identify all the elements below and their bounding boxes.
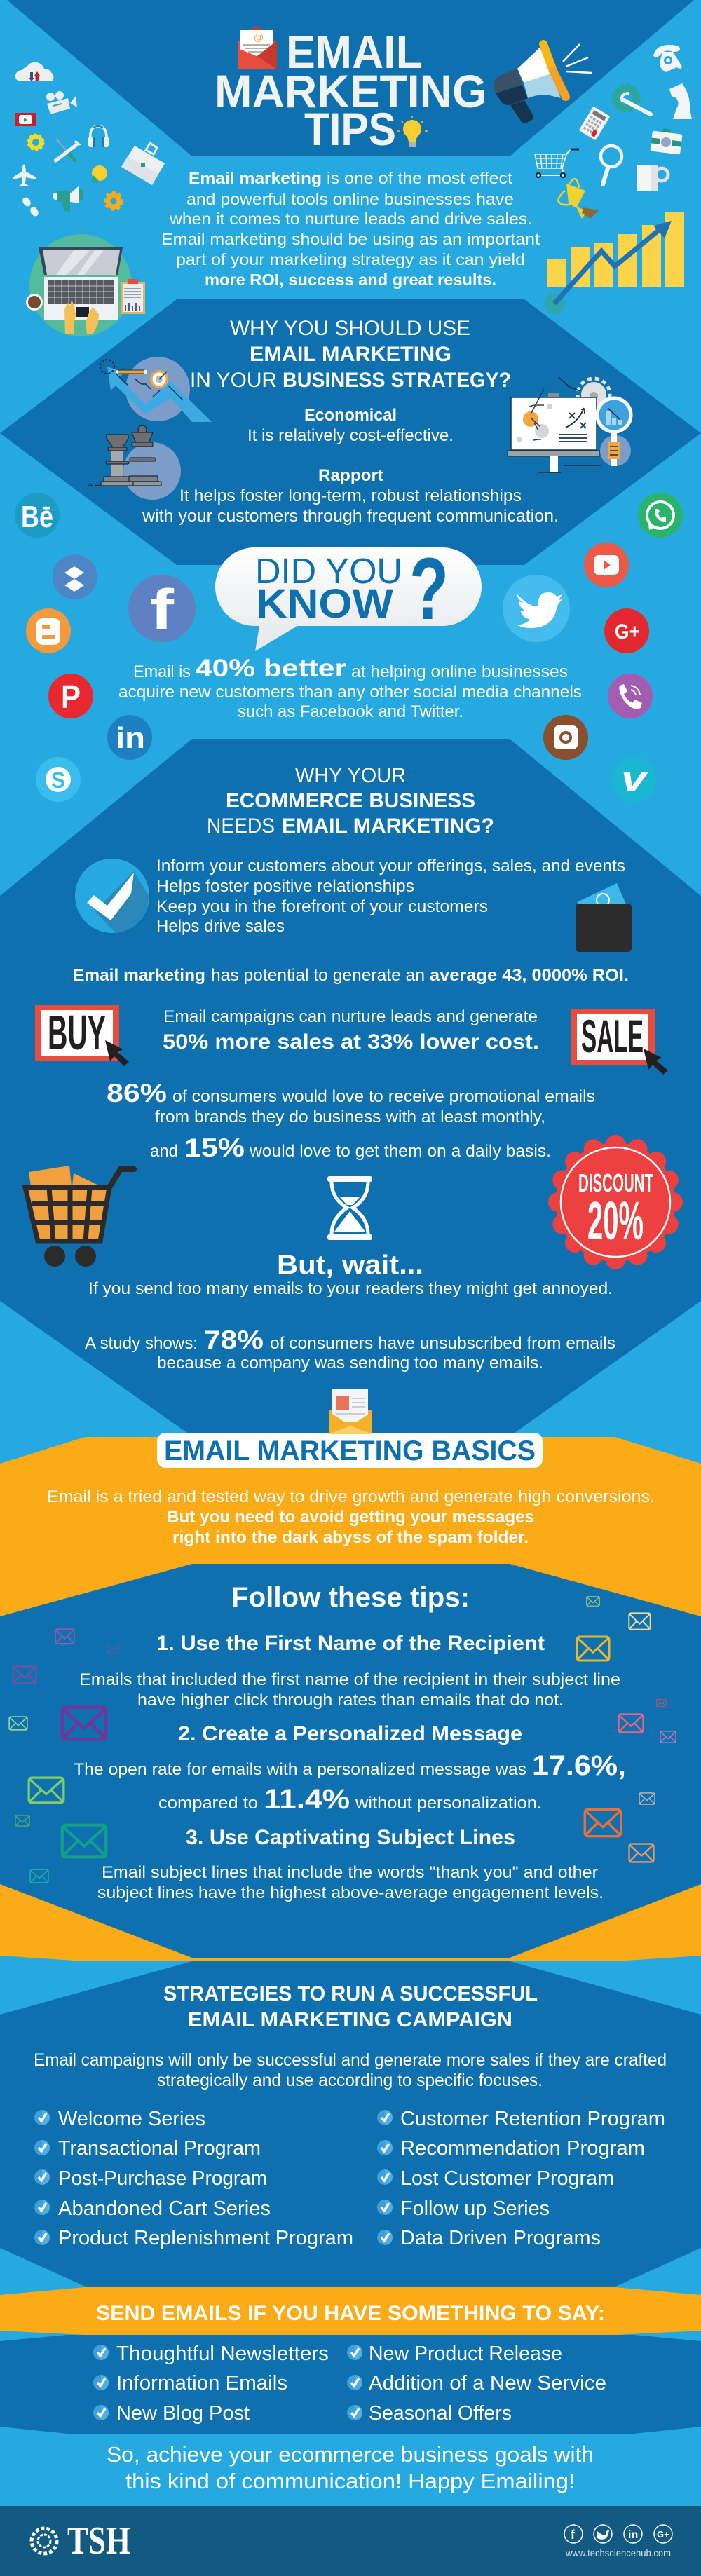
list: strategy programs left: Transactional Program <box>58 2137 261 2160</box>
title: MARKETING <box>215 65 487 117</box>
text block: 50 percent more sales <box>163 1007 539 1054</box>
text block: 86 percent statistic: from brands they do business with at least monthly, <box>155 1108 545 1126</box>
panel: send emails band <box>0 2287 701 2335</box>
heading: follow these tips: Follow these tips: <box>231 1582 470 1613</box>
text block: tip 2: 17.6%, <box>532 1750 626 1781</box>
list: strategy programs right: Lost Customer Program <box>400 2167 614 2190</box>
text block: 40 percent better: 40% better <box>196 655 346 682</box>
text block: basics intro: right into the dark abyss of the spam folder. <box>172 1528 529 1547</box>
icon: orange envelope with letter <box>329 1389 372 1434</box>
text block: intro: Email marketing <box>189 169 322 187</box>
icon: linkedin <box>107 715 152 760</box>
text block: but wait: If you send too many emails to your readers they might get annoyed. <box>88 1279 613 1298</box>
text block: 50 percent more sales: 50% more sales at 33% lower cost. <box>163 1030 539 1054</box>
text block: 78 percent statistic: of consumers have unsubscribed from emails <box>270 1334 615 1353</box>
text block: tip 2: without personalization. <box>355 1794 542 1813</box>
icon: google plus <box>604 608 649 653</box>
text block: strategies intro <box>34 2050 667 2090</box>
icon: calculator <box>579 107 610 140</box>
icon: chess knight <box>669 83 692 119</box>
icon: vimeo <box>611 757 656 802</box>
text block: 15 percent statistic <box>150 1133 551 1162</box>
heading: why you should use: IN YOUR <box>190 369 277 392</box>
list: strategy programs left: Post-Purchase Program <box>58 2167 267 2190</box>
icon: camera <box>650 128 683 155</box>
heading: strategies: STRATEGIES TO RUN A SUCCESSFUL <box>163 1982 538 2005</box>
icons: footer social links: in <box>628 2529 638 2541</box>
icon: glasses <box>21 196 40 218</box>
text block: tip 3: 3. Use Captivating Subject Lines <box>186 1826 515 1849</box>
text block: closing message <box>107 2442 594 2493</box>
icon: whatsapp <box>638 493 683 538</box>
text block: intro: more ROI, success and great results. <box>205 271 496 289</box>
text block: tip 2: The open rate for emails with a personalized message was <box>74 1760 526 1779</box>
text block: basics intro: But you need to avoid getting your messages <box>167 1508 534 1527</box>
icon: behance: Bē <box>21 500 53 534</box>
list: strategy programs right: Data Driven Programs <box>400 2227 601 2249</box>
panel: send emails list <box>0 2335 701 2434</box>
icon: skype: S <box>51 768 65 793</box>
text block: economical: Economical <box>304 406 397 425</box>
text block: 86 percent statistic <box>107 1079 595 1126</box>
badge: discount 20 percent <box>548 1135 683 1269</box>
icon: briefcase <box>121 143 165 185</box>
icons: footer social links: G+ <box>657 2529 669 2540</box>
text block: tip 2: 11.4% <box>264 1784 350 1815</box>
icon: tools <box>55 139 80 161</box>
heading: why your ecommerce business: WHY YOUR <box>295 764 406 787</box>
text block: 40 percent better: at helping online businesses <box>351 662 568 681</box>
text block: 15 percent statistic: 15% <box>184 1133 245 1162</box>
title <box>215 26 487 155</box>
icon: light bulb <box>397 116 428 147</box>
text block: 40 percent better: Email is <box>133 662 191 681</box>
list: strategy programs left: Product Replenishment Program <box>58 2227 353 2249</box>
text block: basics intro: Email is a tried and tested way to drive growth and generate high conversions. <box>47 1487 655 1506</box>
icon: megaphone <box>494 44 592 123</box>
heading: why your ecommerce business: NEEDS <box>207 815 275 838</box>
icon: wallet with money <box>576 883 632 952</box>
text block: intro: part of your marketing strategy as it can yield <box>176 250 525 268</box>
panel: header hexagon <box>7 0 694 156</box>
icon: small bulb <box>91 165 107 184</box>
text block: benefits list <box>156 857 625 936</box>
icon: behance <box>15 493 60 538</box>
text block: 78 percent statistic <box>85 1326 615 1372</box>
icon: pinterest: P <box>61 679 81 715</box>
text block: 86 percent statistic: of consumers would love to receive promotional emails <box>172 1087 595 1106</box>
list: send emails left: New Blog Post <box>116 2402 250 2425</box>
list: send emails right: Addition of a New Service <box>369 2372 606 2394</box>
heading: send emails: SEND EMAILS IF YOU HAVE SOMETHING TO SAY: <box>96 2302 605 2325</box>
icon: cloud <box>15 62 54 81</box>
heading: why you should use: BUSINESS STRATEGY? <box>283 369 511 392</box>
icon: buy sign <box>35 1005 129 1066</box>
icon: wrench and gear <box>613 85 651 114</box>
panel: footer <box>0 2506 701 2576</box>
panel: basics orange band <box>0 1437 701 1961</box>
text block: closing message: So, achieve your ecommerce business goals with <box>107 2442 594 2467</box>
list: send emails right <box>347 2343 606 2425</box>
heading: why your ecommerce business <box>207 764 494 838</box>
text block: economical <box>247 406 454 445</box>
icon: telephone <box>653 45 682 72</box>
icon: viber <box>608 674 653 718</box>
text block: tip 2: 2. Create a Personalized Message <box>178 1722 522 1745</box>
callout: did you know bubble: ? <box>409 540 449 638</box>
callout: did you know bubble: DID YOU <box>255 551 402 591</box>
text block: intro: is one of the most effect <box>327 169 513 187</box>
icons: scattered envelopes <box>9 1597 676 1883</box>
icon: orange gear <box>105 193 122 210</box>
text block: basics intro <box>47 1487 655 1547</box>
list: strategy programs left <box>34 2108 353 2249</box>
text: website url: www.techsciencehub.com <box>565 2547 671 2558</box>
icon: trophy <box>558 179 599 219</box>
icon: pinterest <box>48 674 93 718</box>
list: send emails right: New Product Release <box>369 2343 562 2365</box>
badge: discount 20 percent: 20% <box>587 1191 644 1251</box>
heading: strategies: EMAIL MARKETING CAMPAIGN <box>188 2008 512 2031</box>
panel: follow these tips <box>0 1564 701 1958</box>
text block: average ROI <box>73 966 629 985</box>
icon: youtube <box>584 543 629 587</box>
title: TIPS <box>304 103 396 155</box>
text block: intro: and powerful tools online businesses have <box>186 190 514 208</box>
text block: tip 3: subject lines have the highest above-average engagement levels. <box>97 1883 604 1902</box>
text block: tip 1: Emails that included the first name of the recipient in their subject line <box>79 1670 620 1689</box>
icon: shopping cart <box>25 1166 134 1267</box>
text block: intro: when it comes to nurture leads and drive sales. <box>169 210 532 228</box>
panel: strategies <box>0 1961 701 2287</box>
text block: tip 1 <box>79 1632 620 1710</box>
text block: tip 1: have higher click through rates than emails that do not. <box>137 1691 564 1710</box>
icon: sale sign <box>571 1009 668 1075</box>
icon: yellow gear <box>28 135 43 150</box>
icon: play box <box>15 113 36 126</box>
text block: rapport: It helps foster long-term, robust relationships <box>179 486 522 505</box>
text block: but wait <box>88 1250 613 1298</box>
list: send emails right: Seasonal Offers <box>369 2402 512 2425</box>
icon: target and arrow <box>100 357 212 422</box>
icon: dropbox <box>52 554 97 599</box>
icon: instagram <box>543 715 588 760</box>
icon: email envelope: @ <box>254 32 264 43</box>
logo: TSH <box>32 2519 130 2563</box>
list: strategy programs left: Abandoned Cart Series <box>58 2197 271 2220</box>
text block: 78 percent statistic: because a company was sending too many emails. <box>157 1354 543 1372</box>
icon: facebook: f <box>150 578 175 642</box>
icon: mug <box>637 165 668 191</box>
icon: check mark circle <box>75 859 149 933</box>
text block: intro <box>161 169 540 289</box>
icon: buy sign: BUY <box>48 1005 106 1060</box>
text block: 40 percent better: acquire new customers than any other social media channels <box>118 683 582 702</box>
list: strategy programs right: Recommendation Program <box>400 2137 645 2160</box>
icon: video camera <box>46 91 77 114</box>
text block: benefits list: Inform your customers about your offerings, sales, and events <box>156 857 625 875</box>
panel: ecommerce business <box>0 739 701 1436</box>
text block: rapport <box>142 466 559 526</box>
icon: skype <box>36 757 81 802</box>
icon: shopping cart outline <box>535 149 579 177</box>
heading: why your ecommerce business: EMAIL MARKETING? <box>282 815 494 838</box>
text block: strategies intro: Email campaigns will only be successful and generate more sales if they are crafted <box>34 2050 667 2070</box>
list: send emails left: Information Emails <box>116 2372 287 2394</box>
text block: benefits list: Helps foster positive relationships <box>156 877 414 896</box>
icon: google plus: G+ <box>615 620 640 643</box>
list: send emails left: Thoughtful Newsletters <box>116 2343 329 2365</box>
text block: 78 percent statistic: A study shows: <box>85 1334 198 1353</box>
icon: twitter <box>503 575 570 642</box>
text block: 86 percent statistic: 86% <box>107 1079 167 1108</box>
panel: why use email marketing hexagon <box>0 299 701 565</box>
list: strategy programs right <box>377 2108 665 2249</box>
icon: sale sign: SALE <box>581 1010 644 1062</box>
icon: magnifying glass <box>601 146 622 184</box>
icon: airplane <box>13 164 36 186</box>
text block: 78 percent statistic: 78% <box>204 1326 264 1354</box>
text block: benefits list: Helps drive sales <box>156 917 285 936</box>
text block: tip 3: Email subject lines that include the words "thank you" and other <box>102 1863 598 1882</box>
callout: did you know bubble: KNOW <box>256 581 393 627</box>
text block: rapport: Rapport <box>318 466 383 485</box>
heading: strategies <box>163 1982 538 2031</box>
chart: rising bars with arrow <box>544 212 684 314</box>
heading pill: email marketing basics: EMAIL MARKETING BASICS <box>164 1436 536 1466</box>
logo: TSH: TSH <box>67 2519 130 2563</box>
icon: small megaphone <box>53 186 83 212</box>
list: strategy programs right: Follow up Series <box>400 2197 550 2220</box>
text block: average ROI: has potential to generate an <box>211 966 425 985</box>
text block: tip 3 <box>97 1826 604 1902</box>
text block: average ROI: Email marketing <box>73 966 205 985</box>
icon: chess pieces <box>88 425 181 500</box>
list: strategy programs right: Customer Retention Program <box>400 2108 665 2130</box>
callout: did you know bubble <box>215 540 482 651</box>
icon: linkedin: in <box>116 721 145 754</box>
text block: intro: Email marketing should be using as an important <box>161 230 540 248</box>
icons: footer social links: f <box>571 2528 576 2542</box>
title: EMAIL <box>286 26 423 78</box>
heading: why you should use: WHY YOU SHOULD USE <box>230 317 470 340</box>
text block: average ROI: average 43, 0000% ROI. <box>430 966 629 985</box>
text block: strategies intro: strategically and use according to specific focuses. <box>157 2071 543 2090</box>
text block: but wait: But, wait... <box>277 1250 423 1280</box>
text block: closing message: this kind of communication! Happy Emailing! <box>125 2469 575 2493</box>
text block: tip 2: compared to <box>158 1794 258 1813</box>
icons: footer social links <box>564 2525 672 2543</box>
icon: email envelope <box>238 27 277 69</box>
text block: 15 percent statistic: would love to get them on a daily basis. <box>249 1142 551 1161</box>
text block: benefits list: Keep you in the forefront of your customers <box>156 897 488 916</box>
text block: 40 percent better: such as Facebook and Twitter. <box>238 702 463 721</box>
icon: vimeo: v <box>621 759 649 798</box>
list: strategy programs left: Welcome Series <box>58 2108 205 2130</box>
icon: facebook <box>128 575 196 642</box>
text block: tip 2 <box>74 1722 626 1815</box>
icon: headphones <box>88 126 109 147</box>
list: send emails left <box>93 2343 329 2425</box>
text block: 50 percent more sales: Email campaigns can nurture leads and generate <box>163 1007 538 1026</box>
icon: blogger <box>26 608 71 653</box>
text block: tip 1: 1. Use the First Name of the Recipient <box>156 1632 545 1655</box>
heading: why you should use <box>190 317 511 392</box>
icon: hourglass <box>327 1176 372 1240</box>
icon: laptop on desk <box>26 234 145 336</box>
icon: presentation board with magnifier <box>508 377 631 472</box>
text block: 15 percent statistic: and <box>150 1142 178 1161</box>
heading: why you should use: EMAIL MARKETING <box>250 343 451 366</box>
text block: rapport: with your customers through frequent communication. <box>142 507 559 526</box>
heading: why your ecommerce business: ECOMMERCE BUSINESS <box>226 789 475 812</box>
text block: economical: It is relatively cost-effective. <box>247 426 454 445</box>
text block: 40 percent better <box>118 655 582 721</box>
